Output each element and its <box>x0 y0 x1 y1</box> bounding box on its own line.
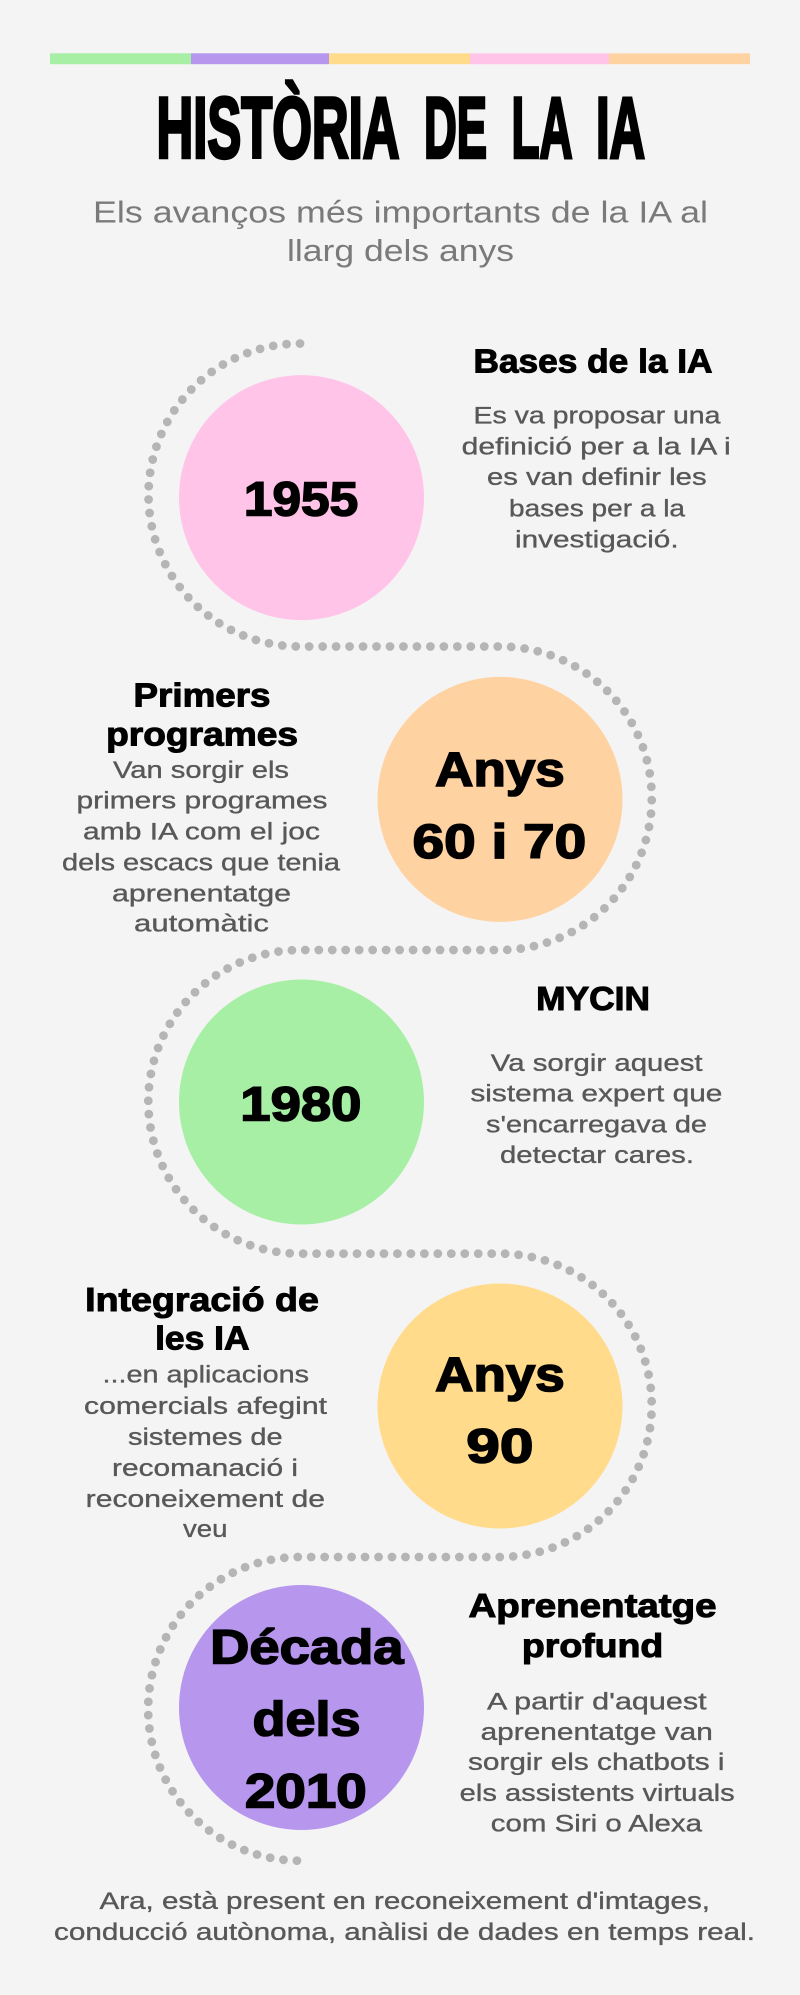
subtitle <box>93 194 708 268</box>
body: MYCIN: sistema expert que <box>470 1081 722 1108</box>
body: MYCIN: s'encarregava de <box>486 1111 707 1138</box>
circle: Anys 60 i 70 <box>378 677 622 922</box>
milestone 1955 <box>179 342 731 620</box>
body: Integració de les IA: recomanació i <box>112 1455 298 1482</box>
body: Primers programes: aprenentatge <box>112 880 291 907</box>
heading: Integració de les IA: les IA <box>155 1320 250 1357</box>
heading: Primers programes: programes <box>106 715 298 752</box>
body: Integració de les IA <box>84 1362 327 1543</box>
milestone Anys 60 i 70 <box>62 676 622 937</box>
body: Bases de la IA: definició per a la IA i <box>462 434 731 461</box>
body: Primers programes: automàtic <box>134 910 269 937</box>
body: Bases de la IA: Es va proposar una <box>474 402 721 429</box>
heading: MYCIN: MYCIN <box>536 980 650 1017</box>
colour bar <box>50 53 750 64</box>
body: Bases de la IA: bases per a la <box>509 495 685 522</box>
year: Anys 60 i 70: Anys <box>435 743 565 797</box>
year: Dècada dels 2010: 2010 <box>245 1764 367 1818</box>
milestone Dècada dels 2010 <box>179 1585 735 1837</box>
closing note: conducció autònoma, anàlisi de dades en temps real. <box>54 1919 755 1946</box>
heading: Integració de les IA <box>85 1281 319 1357</box>
heading: Primers programes <box>106 676 298 752</box>
heading: Primers programes: Primers <box>134 676 270 713</box>
body: Bases de la IA: es van definir les <box>487 464 707 491</box>
year: Anys 90: 90 <box>466 1420 534 1474</box>
year: Dècada dels 2010: Década <box>210 1620 405 1674</box>
heading: Bases de la IA: Bases de la IA <box>474 342 712 380</box>
year: Anys 60 i 70: 60 i 70 <box>412 815 586 869</box>
body: Bases de la IA <box>462 402 731 553</box>
heading: Integració de les IA: Integració de <box>85 1281 319 1318</box>
year: Anys 60 i 70 <box>412 743 586 869</box>
circle: 1980 <box>179 980 424 1224</box>
circle: 1955 <box>179 375 424 620</box>
circle: Anys 90 <box>378 1284 622 1528</box>
closing note <box>54 1888 755 1946</box>
body: Integració de les IA: ...en aplicacions <box>102 1362 309 1389</box>
body: MYCIN <box>470 1050 722 1169</box>
body: Primers programes: Van sorgir els <box>113 757 289 784</box>
body: MYCIN: detectar cares. <box>500 1142 694 1169</box>
body: Aprenentatge profund: com Siri o Alexa <box>491 1810 702 1837</box>
heading: Aprenentatge profund: Aprenentatge <box>468 1587 716 1624</box>
body: Primers programes <box>62 757 340 937</box>
milestone Anys 90 <box>84 1281 622 1543</box>
circle: Dècada dels 2010 <box>179 1585 424 1830</box>
year: 1955: 1955 <box>244 472 358 526</box>
year: Anys 90: Anys <box>435 1348 565 1402</box>
body: Bases de la IA: investigació. <box>515 526 679 553</box>
body: Primers programes: amb IA com el joc <box>83 819 320 846</box>
body: Integració de les IA: veu <box>183 1516 228 1543</box>
body: Integració de les IA: sistemes de <box>128 1424 283 1451</box>
title: DE <box>424 80 487 176</box>
body: Aprenentatge profund: A partir d'aquest <box>487 1688 707 1715</box>
title: HISTÒRIA <box>156 80 400 176</box>
body: Aprenentatge profund: aprenentatge van <box>481 1719 713 1746</box>
body: Primers programes: primers programes <box>76 787 328 814</box>
body: Aprenentatge profund <box>460 1688 735 1837</box>
body: Primers programes: dels escacs que tenia <box>62 849 340 876</box>
body: Integració de les IA: reconeixement de <box>86 1486 325 1513</box>
milestone 1980 <box>179 980 722 1224</box>
closing note: Ara, està present en reconeixement d'imtages, <box>100 1888 710 1915</box>
year: 1980: 1980 <box>240 1078 362 1132</box>
year: Dècada dels 2010 <box>210 1620 405 1818</box>
body: Integració de les IA: comercials afegint <box>84 1393 327 1420</box>
subtitle: Els avanços més importants de la IA al <box>93 194 708 230</box>
body: Aprenentatge profund: sorgir els chatbots i <box>468 1749 724 1776</box>
body: MYCIN: Va sorgir aquest <box>491 1050 703 1077</box>
heading: Aprenentatge profund: profund <box>522 1627 663 1664</box>
title: LA <box>512 80 572 176</box>
year: Dècada dels 2010: dels <box>252 1692 360 1746</box>
heading: Aprenentatge profund <box>468 1587 716 1664</box>
subtitle: llarg dels anys <box>287 233 514 268</box>
year: Anys 90 <box>435 1348 565 1474</box>
title: IA <box>596 80 645 176</box>
dotted timeline path <box>148 344 652 1861</box>
body: Aprenentatge profund: els assistents virtuals <box>460 1780 735 1807</box>
